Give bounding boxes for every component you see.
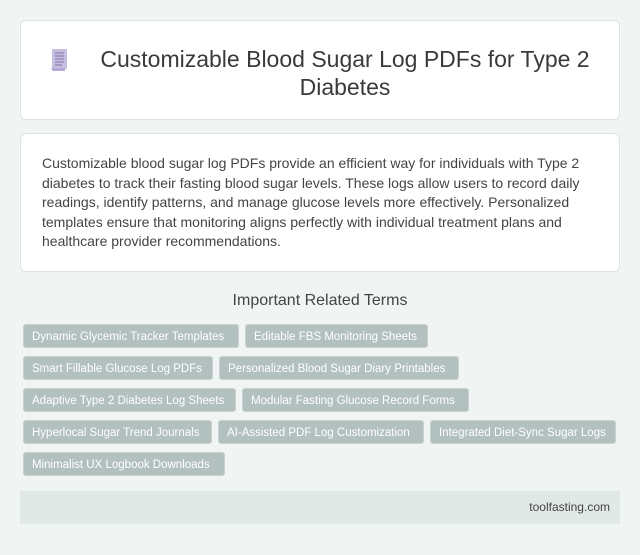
tags: Modular Fasting Glucose Record Forms (251, 395, 455, 407)
tags: Hyperlocal Sugar Trend Journals (32, 427, 199, 439)
tags: AI-Assisted PDF Log Customization (227, 427, 410, 439)
tags: Adaptive Type 2 Diabetes Log Sheets (32, 395, 224, 407)
icon: document (51, 49, 67, 71)
tags: Dynamic Glycemic Tracker Templates (32, 331, 224, 343)
tags: Editable FBS Monitoring Sheets (254, 331, 417, 343)
tags: Minimalist UX Logbook Downloads (32, 459, 210, 471)
tags: Personalized Blood Sugar Diary Printables (228, 363, 445, 375)
description text: Customizable blood sugar log PDFs provide an efficient way for individuals with Type 2 diabetes to track their fasting blood sugar levels. These logs allow users to record daily readings, identify patterns, and manage glucose levels more effectively. Personalized templates ensure that monitoring aligns perfectly with individual treatment plans and healthcare provider recommendations. (42, 155, 579, 249)
title: Customizable Blood Sugar Log PDFs for Type 2 Diabetes (100, 46, 590, 100)
tags: Integrated Diet-Sync Sugar Logs (439, 427, 606, 439)
header card (20, 20, 620, 120)
tags: Smart Fillable Glucose Log PDFs (32, 363, 202, 375)
section heading: Important Related Terms (233, 292, 407, 309)
description card (20, 133, 620, 272)
footer source: toolfasting.com (529, 500, 610, 514)
footer (20, 491, 620, 524)
